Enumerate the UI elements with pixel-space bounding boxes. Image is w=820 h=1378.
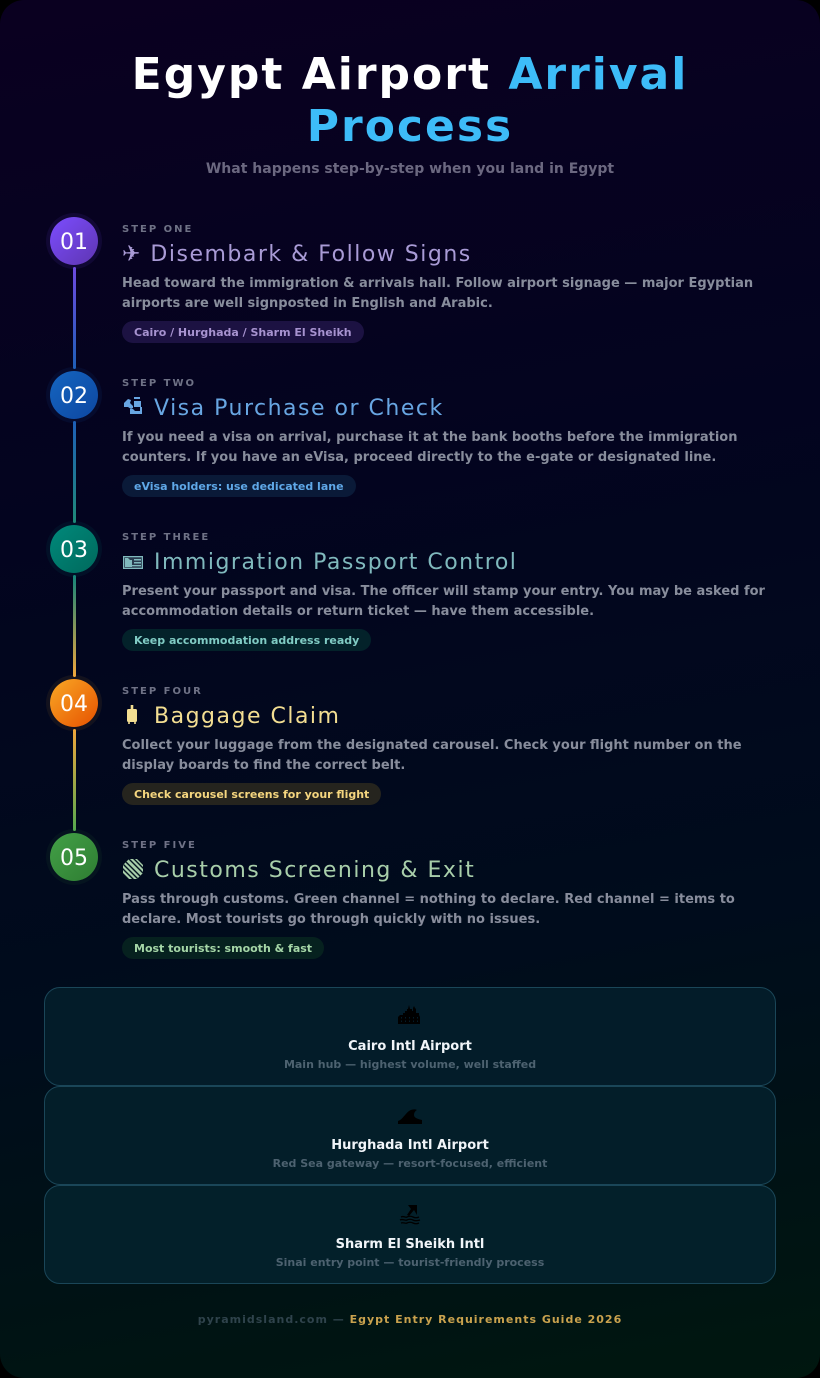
step 4 text [122,686,742,805]
airport card: Hurghada [44,1086,776,1185]
step 2 label: STEP TWO [122,378,196,389]
airport note: Red Sea gateway — resort-focused, efficient [273,1157,547,1170]
connector line 3 [72,575,76,677]
step 2 description: counters. If you have an eVisa, proceed directly to the e-gate or designated line. [122,450,716,465]
connector line 4 [72,729,76,831]
step 5 tag: Most tourists: smooth & fast [134,942,312,955]
airport name: Sharm El Sheikh Intl [336,1237,484,1252]
step 4 tag: Check carousel screens for your flight [134,788,369,801]
step 2 text [122,378,737,497]
airport card: Sharm El Sheikh [44,1185,776,1284]
icon: sail over waves [400,1205,420,1224]
title: Egypt Airport Arrival [132,49,688,100]
step 2 tag: eVisa holders: use dedicated lane [134,480,344,493]
step 1 description: airports are well signposted in English and Arabic. [122,296,493,311]
step 1 description [122,276,753,311]
step 2 description [122,430,737,465]
step 4 description: Collect your luggage from the designated carousel. Check your flight number on the [122,738,742,753]
step 3 description: accommodation details or return ticket — have them accessible. [122,604,594,619]
step 4 tag [122,783,381,805]
step 4 label: STEP FOUR [122,686,203,697]
step 3 tag [122,629,371,651]
airport name: Cairo Intl Airport [348,1039,472,1054]
step 1 number badge: 01 [60,230,88,255]
title [132,49,688,152]
step 1 text [122,224,753,343]
step 4 heading: Baggage Claim [154,704,340,729]
step 4 number badge [50,679,98,727]
connector line 1 [72,267,76,369]
step 5 description: Pass through customs. Green channel = nothing to declare. Red channel = items to [122,892,735,907]
step 1 heading: ✈ Disembark & Follow Signs [122,242,472,267]
step 2 number badge [50,371,98,419]
step 3 number badge [50,525,98,573]
icon: luggage [127,705,137,724]
step 5 number badge [50,833,98,881]
airport name: Hurghada Intl Airport [331,1138,489,1153]
step 3 text [122,532,765,651]
step 1 tag: Cairo / Hurghada / Sharm El Sheikh [134,326,352,339]
step 5 tag [122,937,324,959]
step 3 tag: Keep accommodation address ready [134,634,359,647]
step 1 label: STEP ONE [122,224,193,235]
icon: city [398,1006,420,1024]
airport card: Cairo [44,987,776,1086]
step 1 tag [122,321,364,343]
step 5 text [122,840,735,959]
step 3 label: STEP THREE [122,532,210,543]
connector line 2 [72,421,76,523]
step 2 heading: Visa Purchase or Check [154,396,444,421]
step 5 description: declare. Most tourists go through quickly with no issues. [122,912,540,927]
step 5 heading: Customs Screening & Exit [154,858,475,883]
airport note: Main hub — highest volume, well staffed [284,1058,536,1071]
airport note: Sinai entry point — tourist-friendly process [276,1256,544,1269]
footer: pyramidsland.com — Egypt Entry Requirements Guide 2026 [198,1313,622,1326]
icon: wave [398,1109,422,1124]
step 5 description [122,892,735,927]
icon: id card [123,556,143,569]
step 3 description [122,584,765,619]
icon: customs hatched circle [123,859,143,879]
step 4 description [122,738,742,773]
step 1 description: Head toward the immigration & arrivals hall. Follow airport signage — major Egyptian [122,276,753,291]
step 5 label: STEP FIVE [122,840,197,851]
step 3 description: Present your passport and visa. The officer will stamp your entry. You may be asked for [122,584,765,599]
step 3 heading: Immigration Passport Control [154,550,517,575]
step 2 tag [122,475,356,497]
step 4 number badge: 04 [60,692,88,717]
step 1 number badge [50,217,98,265]
icon: passport control [124,397,142,414]
step 2 number badge: 02 [60,384,88,409]
step 4 description: display boards to find the correct belt. [122,758,405,773]
step 5 number badge: 05 [60,846,88,871]
subtitle: What happens step-by-step when you land in Egypt [206,161,614,177]
step 3 number badge: 03 [60,538,88,563]
title: Process [307,101,513,152]
step 2 description: If you need a visa on arrival, purchase it at the bank booths before the immigration [122,430,737,445]
